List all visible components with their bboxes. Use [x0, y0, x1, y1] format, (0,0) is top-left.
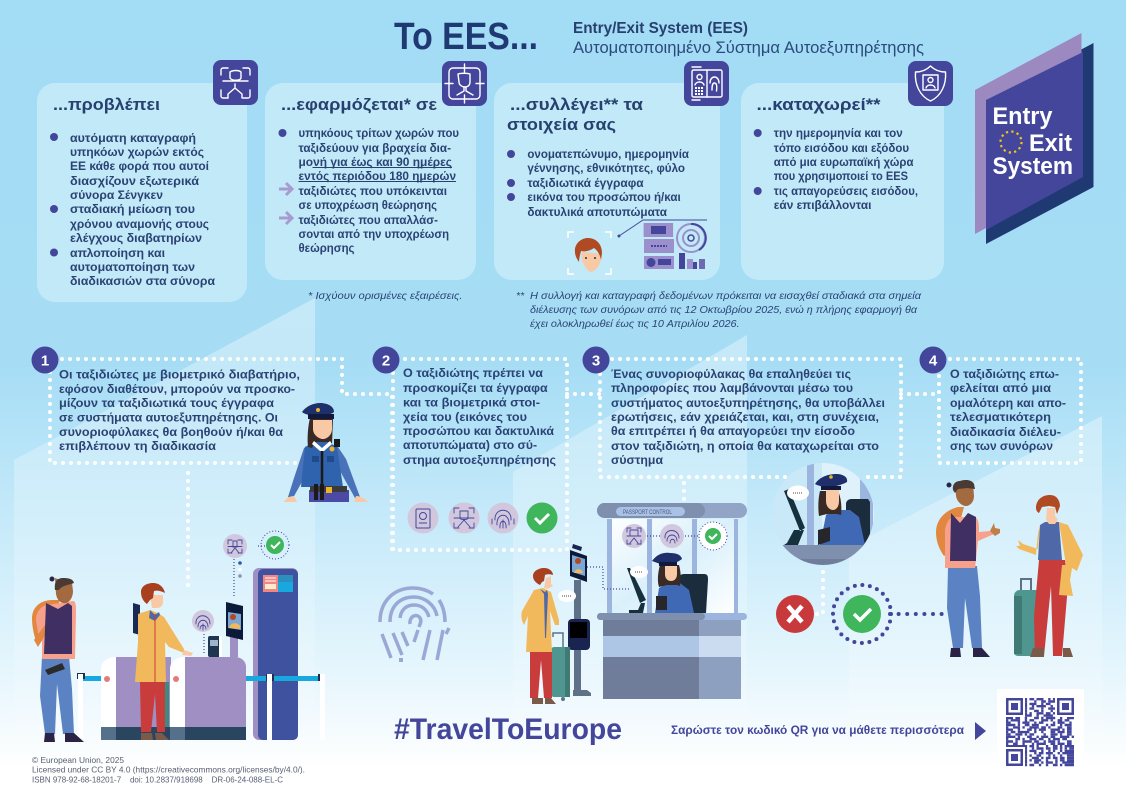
- hair: [308, 418, 333, 448]
- icon: approved: [833, 585, 891, 643]
- number badge 3: [582, 346, 610, 374]
- panel text: ΕΕ κάθε φορά που αυτοί: [70, 159, 209, 173]
- hashtag: #TravelToEurope: [394, 713, 622, 746]
- data graphics: [644, 223, 706, 269]
- panel text: διαδικασιών στα σύνορα: [70, 274, 216, 288]
- panel text: ταξιδιώτες που υπόκεινται: [298, 184, 447, 198]
- title: Το EES...: [394, 16, 538, 58]
- panel text: μονή για έως και 90 ημέρες: [298, 155, 452, 169]
- step 1 text: εφόσον διαθέτουν, μπορούν να προσκο-: [59, 382, 295, 396]
- roof: PASSPORT CONTROL: [623, 509, 672, 516]
- woman: [1014, 495, 1083, 657]
- arrow to QR: [975, 722, 986, 740]
- step 3 text: θα επιτρέπει ή θα απαγορεύει την είσοδο: [611, 424, 855, 438]
- step 4 text: Ο ταξιδιώτης επω-: [950, 367, 1059, 381]
- panel text: από μια ευρωπαϊκή χώρα: [774, 155, 914, 169]
- number badge 4: 4: [929, 352, 938, 370]
- speech bubble: [558, 590, 576, 602]
- finder patterns: [1005, 697, 1075, 767]
- logo: Entry Exit System: [975, 33, 1094, 244]
- speech bubble: [630, 566, 648, 578]
- icon: shield: [908, 61, 953, 106]
- suitcase: [551, 633, 570, 701]
- panel text: σε υποχρέωση θεώρησης: [298, 198, 437, 212]
- logo: Entry Exit System: System: [992, 153, 1073, 180]
- panel text: την ημερομηνία και τον: [774, 126, 903, 140]
- step 4 text: [920, 346, 1066, 453]
- panel text: αυτοματοποίηση των: [70, 260, 195, 274]
- panel: records: [741, 83, 944, 280]
- footnote: rollout dates: [516, 290, 922, 330]
- illustration: self-service gates: [32, 531, 325, 742]
- bullets: [754, 129, 762, 195]
- panel text: υπηκόους τρίτων χωρών που: [298, 126, 459, 140]
- step 1 text: Οι ταξιδιώτες με βιομετρικό διαβατήριο,: [59, 368, 300, 382]
- face and collar: [313, 420, 332, 439]
- copyright block: ISBN 978-92-68-18201-7 doi: 10.2837/918698 DR-06-24-088-EL-C: [32, 776, 283, 784]
- step 2 text: [372, 346, 556, 467]
- windows: [608, 519, 734, 614]
- panel text: ονοματεπώνυμο, ημερομηνία: [527, 147, 689, 161]
- heading: ...συλλέγει** τα: [510, 95, 644, 114]
- step 2 text: χεία του (εικόνες του: [403, 410, 527, 424]
- check icon: [526, 502, 558, 534]
- step 2 text: και τα βιομετρικά στοι-: [403, 396, 540, 410]
- step 3 text: πληροφορίες που λαμβάνονται μέσω του: [611, 381, 853, 395]
- logo: Entry Exit System: Exit: [1029, 130, 1072, 157]
- step 4 text: διαδικασία διέλευ-: [950, 425, 1061, 439]
- step 4 text: φελείται από μια: [950, 381, 1052, 395]
- copyright block: Licensed under CC BY 4.0 (https://creativecommons.org/licenses/by/4.0/).: [32, 766, 305, 774]
- kiosk: [253, 568, 298, 740]
- panel text: [298, 126, 459, 255]
- step 1 text: μίζουν τα ταξιδιωτικά τους έγγραφα: [59, 396, 275, 410]
- illustration: border officer: [284, 403, 368, 502]
- bullets: [507, 150, 515, 201]
- traveller woman: [133, 583, 193, 740]
- step 4 text: τελεσματικότερη: [950, 410, 1051, 424]
- step 1 text: συνοριοφύλακες θα βοηθούν ή/και θα: [59, 425, 284, 439]
- booth verification icons: [622, 522, 727, 550]
- footnote: rollout dates: Η συλλογή και καταγραφή δεδομένων πρόκειται να εισαχθεί σταδιακά στα σημεία: [530, 290, 922, 302]
- illustration: officer close-up: [772, 463, 874, 567]
- subtitle: [573, 20, 924, 57]
- number badge 3: 3: [592, 352, 600, 370]
- footnote: rollout dates: διέλευσης των συνόρων από τις 12 Οκτωβρίου 2025, ενώ η πλήρης εφαρμογή θα: [530, 304, 918, 316]
- pillars: [607, 519, 738, 614]
- hands: [284, 496, 368, 502]
- step 1 text: [32, 346, 300, 453]
- heading: ...εφαρμόζεται* σε: [281, 95, 437, 114]
- icon: rejected: [776, 595, 814, 633]
- man: [936, 480, 1000, 657]
- step 4 text: ομαλότερη και απο-: [950, 396, 1066, 410]
- panel: provides: [37, 83, 247, 302]
- copyright block: [32, 756, 305, 784]
- step 2 text: στημα αυτοεξυπηρέτησης: [403, 453, 556, 467]
- number badge 1: 1: [41, 352, 49, 370]
- roof: [597, 503, 747, 518]
- panel text: υπηκόων χωρών εκτός: [70, 145, 204, 159]
- illustration: happy travellers: [936, 480, 1083, 657]
- bullet: [278, 129, 286, 137]
- step 2 text: προσώπου και δακτυλικά: [403, 424, 555, 438]
- panel text: ταξιδιώτες που απαλλάσ-: [298, 213, 438, 227]
- connector line: [619, 220, 707, 236]
- arrows: [279, 183, 292, 224]
- desk: [597, 613, 747, 699]
- woman: [521, 568, 559, 704]
- panel text: χρόνου αναμονής στους: [70, 217, 209, 231]
- heading: στοιχεία σας: [507, 115, 616, 134]
- verification icons: [192, 531, 289, 655]
- step 2 text: αποτυπώματα) στο σύ-: [403, 438, 537, 452]
- panel text: αυτόματη καταγραφή: [70, 131, 196, 145]
- icon: passport and fingerprint: [684, 61, 729, 106]
- panel text: σύνορα Σένγκεν: [70, 188, 163, 202]
- hat: [302, 403, 334, 416]
- panel text: τόπο εισόδου και εξόδου: [774, 141, 909, 155]
- dotted flow connectors: [50, 359, 1081, 614]
- step 2 biometric icons: [408, 502, 558, 534]
- step 3 text: συστήματος αυτοεξυπηρέτησης, θα υποβάλλει: [611, 396, 885, 410]
- logo: Entry Exit System: Entry: [992, 103, 1053, 130]
- icon: face in frame: [568, 232, 611, 274]
- panel text: εντός περιόδου 180 ημερών: [298, 169, 456, 183]
- icon: face target: [442, 61, 487, 106]
- number badge 4: [920, 346, 946, 374]
- step 3 text: ερωτήσεις, εάν χρειάζεται, και, στη συνέχεια,: [611, 410, 879, 424]
- pole and scanner: [568, 544, 591, 696]
- icon: face scan: [213, 60, 258, 105]
- step 3 text: [582, 346, 885, 467]
- panel text: ελέγχους διαβατηρίων: [70, 231, 202, 245]
- panel text: εάν επιβάλλονται: [774, 198, 871, 212]
- panel text: ταξιδιωτικά έγγραφα: [527, 176, 644, 190]
- step 3 text: σύστημα: [611, 453, 664, 467]
- copyright block: © European Union, 2025: [32, 756, 124, 765]
- passport icon: [408, 502, 438, 534]
- bullets: [50, 133, 58, 256]
- QR code: [997, 689, 1084, 770]
- number badge 2: 2: [382, 352, 390, 370]
- background light shards: [14, 298, 1102, 780]
- subtitle: Entry/Exit System (EES): [573, 20, 748, 37]
- panel text: απλοποίηση και: [70, 246, 165, 260]
- panel text: εικόνα του προσώπου ή/και: [527, 190, 681, 204]
- panel text: γέννησης, εθνικότητες, φύλο: [527, 161, 685, 175]
- QR prompt: Σαρώστε τον κωδικό QR για να μάθετε περισσότερα: [671, 725, 964, 737]
- subtitle: Αυτοματοποιημένο Σύστημα Αυτοεξυπηρέτησης: [573, 39, 924, 57]
- booth officer: [652, 553, 708, 613]
- torso: [301, 442, 343, 487]
- panel text: [527, 147, 689, 219]
- panel text: [774, 126, 918, 212]
- panel text: θεώρησης: [298, 241, 354, 255]
- fingerprint icon: [488, 502, 518, 534]
- panel: applies to: [265, 83, 476, 280]
- gate left: [101, 657, 171, 740]
- panel text: σονται από την υποχρέωση: [298, 227, 449, 241]
- panel text: που χρησιμοποιεί το EES: [774, 169, 908, 183]
- step 1 text: επιβλέπουν τη διαδικασία: [59, 439, 217, 453]
- heading: [507, 95, 644, 134]
- face icon: [448, 502, 480, 534]
- panel: collects: [494, 83, 720, 280]
- heading: ...καταχωρεί**: [756, 95, 881, 114]
- footnote: exceptions: * Ισχύουν ορισμένες εξαιρέσεις.: [308, 290, 462, 302]
- panel text: διασχίζουν εξωτερικά: [70, 174, 200, 188]
- step 4 text: σης των συνόρων: [950, 439, 1053, 453]
- panel text: ταξιδεύουν για βραχεία δια-: [298, 141, 451, 155]
- illustration: traveller at booth scanner: [521, 544, 630, 704]
- number badge 1: [32, 346, 58, 374]
- barrier ropes: [77, 673, 325, 740]
- step 2 text: Ο ταξιδιώτης πρέπει να: [403, 366, 544, 380]
- step 2 text: προσκομίζει τα έγγραφα: [403, 381, 548, 395]
- panel text: δακτυλικά αποτυπώματα: [527, 205, 667, 219]
- arms: [288, 445, 360, 498]
- step 3 text: στον ταξιδιώτη, η οποία θα καταχωρείται στο: [611, 439, 879, 453]
- icon: large fingerprint: [380, 588, 449, 662]
- dotted connector to travellers: [890, 612, 945, 616]
- panel text: [70, 131, 216, 288]
- illustration: passport control booth: [597, 503, 747, 699]
- traveller man: [32, 576, 84, 742]
- heading: ...προβλέπει: [53, 95, 160, 114]
- panel text: τις απαγορεύσεις εισόδου,: [774, 184, 918, 198]
- footnote: rollout dates: έχει ολοκληρωθεί έως τις 10 Απριλίου 2026.: [530, 318, 740, 330]
- footnote: rollout dates: **: [516, 290, 525, 302]
- step 1 text: σε συστήματα αυτοεξυπηρέτησης. Οι: [59, 410, 278, 424]
- gate right: [170, 602, 246, 740]
- panel text: σταδιακή μείωση του: [70, 202, 195, 216]
- step 3 text: Ένας συνοριοφύλακας θα επαληθεύει τις: [611, 367, 851, 381]
- monitor: [627, 568, 646, 613]
- number badge 2: [372, 346, 400, 374]
